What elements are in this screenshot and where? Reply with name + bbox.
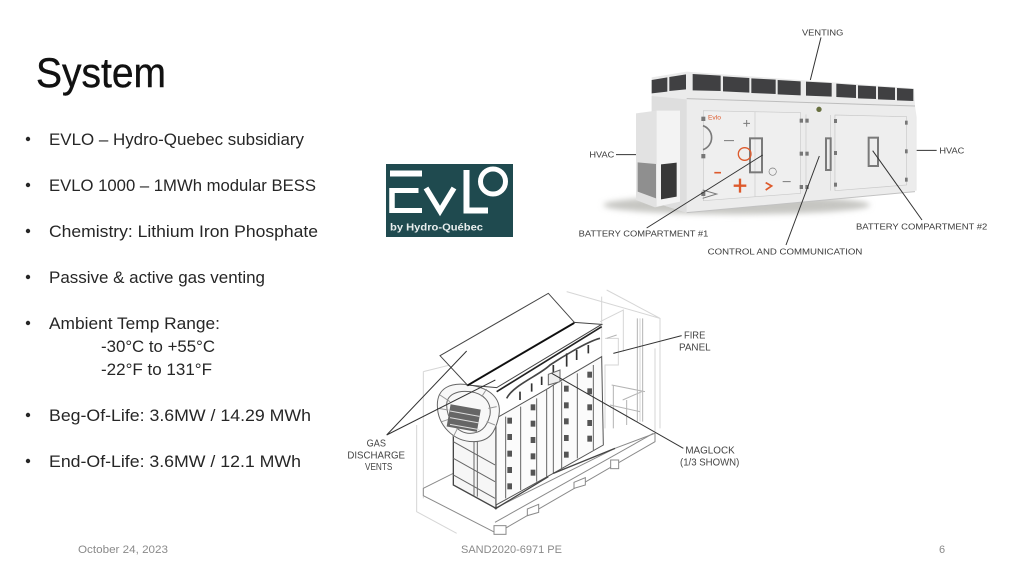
orange brand marks — [708, 114, 772, 193]
callout lines — [387, 336, 683, 448]
bullet: subsidiary: EVLO – Hydro-Quebec subsidiary — [49, 131, 305, 149]
bullet: ambient temperature range: Ambient Temp Range: — [49, 315, 220, 333]
callout labels: CONTROL AND COMMUNICATION — [708, 246, 862, 256]
battery cabinet — [453, 357, 615, 509]
callout labels: BATTERY COMPARTMENT #2 — [856, 221, 988, 231]
door handles and hardware — [703, 120, 878, 198]
callout labels — [579, 28, 988, 256]
title: System — [36, 49, 166, 96]
roof vents — [652, 74, 913, 101]
open roof lid — [440, 293, 602, 392]
footer — [78, 544, 945, 556]
logo: EVLO by Hydro-Québec: by Hydro-Québec — [390, 222, 483, 234]
callout lines — [616, 37, 937, 245]
footer document number: SAND2020-6971 PE — [461, 544, 562, 556]
bullet: chemistry: Chemistry: Lithium Iron Phosphate — [49, 223, 318, 241]
callout labels: GAS — [367, 438, 386, 449]
callout labels: VENTING — [802, 28, 843, 38]
callout labels: (1/3 SHOWN) — [680, 458, 739, 469]
container body — [652, 72, 917, 213]
callout labels: HVAC — [939, 145, 964, 155]
logo: EVLO by Hydro-Québec — [386, 164, 513, 237]
bullet: gas venting: Passive & active gas venting — [49, 269, 265, 287]
callout labels: DISCHARGE — [347, 450, 406, 461]
callout labels: FIRE — [684, 330, 706, 341]
bullet: modular BESS: EVLO 1000 – 1MWh modular BESS — [49, 177, 316, 195]
footer date: October 24, 2023 — [78, 544, 168, 556]
door latches — [701, 107, 908, 196]
HVAC unit — [636, 111, 680, 207]
callout labels — [347, 330, 739, 473]
bullet: ambient temperature range — [26, 315, 220, 379]
diagram: exterior of EVLO 1000 container — [579, 28, 988, 256]
bullet: ambient temperature range: -30°C to +55°C — [101, 338, 215, 356]
bullet: ambient temperature range: -22°F to 131°F — [101, 361, 212, 379]
gas discharge vent ducts — [437, 338, 600, 442]
callout labels: BATTERY COMPARTMENT #1 — [579, 229, 709, 239]
callout labels: VENTS — [365, 462, 392, 473]
battery module latches — [507, 372, 592, 489]
ghost enclosure — [417, 290, 660, 533]
skid base — [423, 433, 655, 534]
orange brand marks: Evlo — [708, 114, 721, 121]
page number: 6 — [939, 544, 945, 556]
bullet: beginning of life: Beg-Of-Life: 3.6MW / 14.29 MWh — [49, 407, 311, 425]
bullet list — [26, 131, 318, 471]
diagram: internal isometric view — [347, 290, 739, 534]
callout labels: MAGLOCK — [685, 446, 735, 457]
callout labels: PANEL — [679, 342, 711, 353]
ground shadow — [603, 196, 870, 214]
callout labels: HVAC — [589, 150, 614, 160]
bullet: end of life: End-Of-Life: 3.6MW / 12.1 MWh — [49, 453, 301, 471]
